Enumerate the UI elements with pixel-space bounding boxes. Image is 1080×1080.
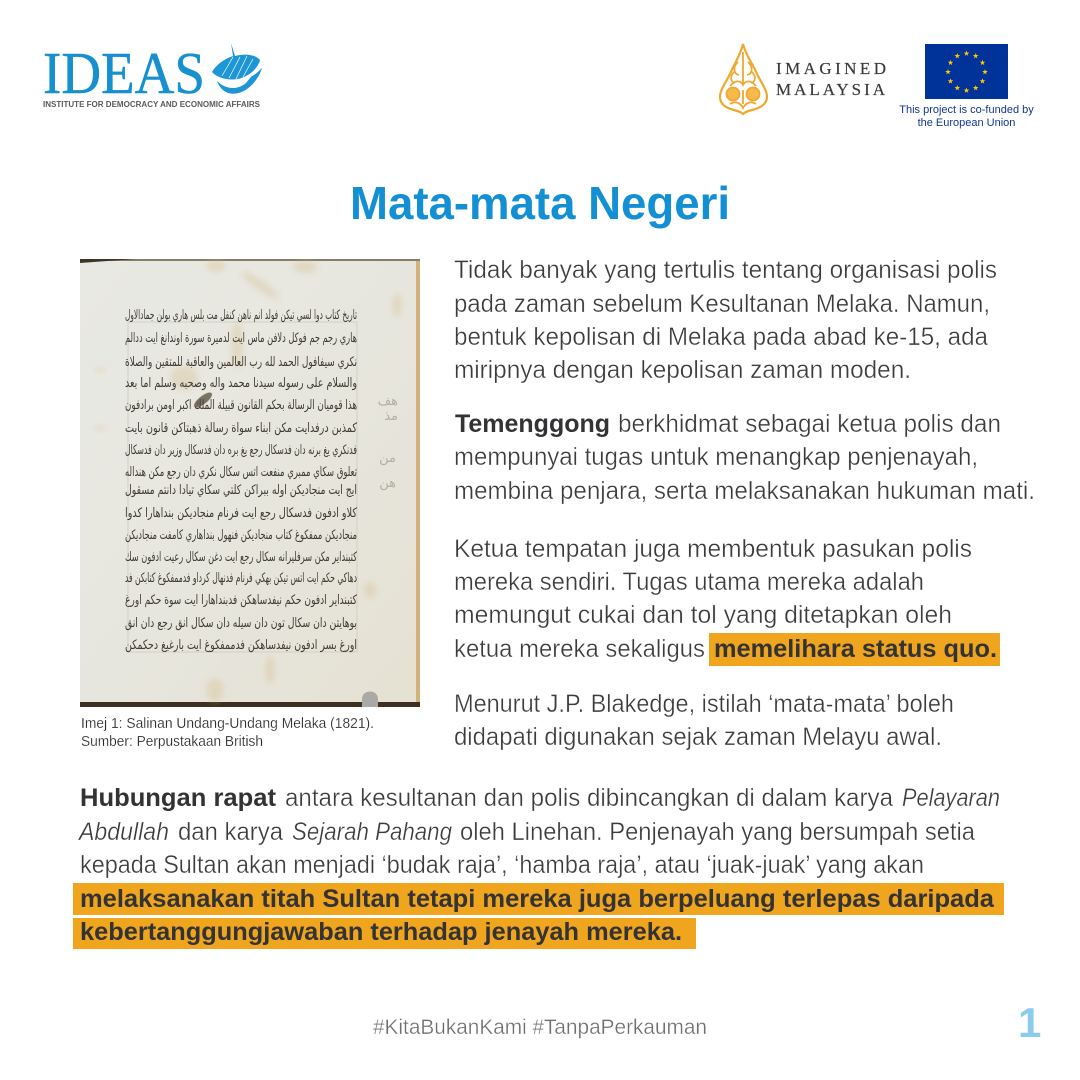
image caption xyxy=(81,716,374,750)
manuscript Jawi text: اورغ بسر ادفون نيفدساهكن فدممفكوغ ايت بارغيغ دحكمكن xyxy=(125,638,357,653)
title: Mata-mata Negeri xyxy=(350,177,730,229)
text block: sultanate and police: oleh Linehan. Penjenayah yang bersumpah setia xyxy=(460,818,975,846)
text block: sultanate and police: Sejarah Pahang xyxy=(292,818,452,846)
highlight: status quo xyxy=(709,633,1000,666)
manuscript Jawi text: والسلام على رسوله سيدنا محمد واله وصحبه وسلم اما بعد xyxy=(125,376,357,391)
manuscript stains xyxy=(93,260,402,702)
ruled text frame xyxy=(128,322,357,652)
text block: sultanate and police xyxy=(73,784,1004,949)
text block: Blakedge: didapati digunakan sejak zaman Melayu awal. xyxy=(454,723,942,751)
text block: sultanate and police: dan karya xyxy=(178,818,283,846)
wordmark: Imagined: IMAGINED xyxy=(776,59,886,78)
text block: local chiefs: ketua mereka sekaligus xyxy=(454,635,705,663)
text block: sultanate and police: kepada Sultan akan menjadi ‘budak raja’, ‘hamba raja’, atau ‘juak-juak’ yang akan xyxy=(80,851,924,879)
logo: IDEAS xyxy=(43,40,262,109)
text block: Temenggong: berkhidmat sebagai ketua polis dan xyxy=(618,410,1001,438)
text block: sultanate and police: antara kesultanan dan polis dibincangkan di dalam karya xyxy=(285,784,893,812)
wordmark: IDEAS: IDEAS xyxy=(43,40,205,106)
manuscript Jawi text: فدنكري يغ برنه دان فدسكال رجع يغ بره دان فدسكال وزير دان فدسكال xyxy=(125,443,357,458)
manuscript Jawi text: كتبنداير مكن سرفليرانه سكال رجع ايت دغن سكال رعيت ادفون سك xyxy=(125,550,358,565)
text block: Temenggong: membina penjara, serta melaksanakan hukuman mati. xyxy=(454,477,1035,505)
text block: pre-Melaka policing: bentuk kepolisan di Melaka pada abad ke-15, ada xyxy=(454,323,988,351)
manuscript page xyxy=(80,259,420,707)
text block: Temenggong: Temenggong xyxy=(455,410,610,438)
text block: Temenggong xyxy=(454,410,1035,505)
icon: gunungan xyxy=(720,44,767,114)
manuscript Jawi text: دهاكي حكم ايت اتس تيكن بهكي فرنام فدنهال كرداو فدممفكوغ كتابكن فد xyxy=(125,571,357,586)
ink smudge xyxy=(194,392,212,408)
margin notes: من xyxy=(379,451,396,466)
text block: sultanate and police: kebertanggungjawaban terhadap jenayah mereka. xyxy=(80,918,682,946)
tagline: institute name: INSTITUTE FOR DEMOCRACY AND ECONOMIC AFFAIRS xyxy=(43,100,261,109)
caption: EU co-funding xyxy=(899,104,1034,129)
icon: EU flag xyxy=(925,44,1008,99)
caption: EU co-funding: the European Union xyxy=(918,117,1015,129)
text block: sultanate and police: melaksanakan titah Sultan tetapi mereka juga berpeluang terlepas daripada xyxy=(80,885,995,913)
text block: local chiefs xyxy=(454,535,1000,666)
margin notes: هن xyxy=(379,476,396,491)
text block: pre-Melaka policing: pada zaman sebelum Kesultanan Melaka. Namun, xyxy=(454,290,990,318)
manuscript Jawi text: كتبنداير ادفون حكم نيفدساهكن فدبنداهارا ايت سوة حكم اورغ xyxy=(125,593,358,608)
text block: sultanate and police: Abdullah xyxy=(77,818,169,846)
text block: sultanate and police: Pelayaran xyxy=(902,784,1000,812)
image caption: Sumber: Perpustakaan British xyxy=(81,734,263,750)
manuscript Jawi text: هاري رجم جم فوكل دلافن ماس ايت لدميرة سورة اوندانغ ايت ددالم xyxy=(125,331,357,346)
text block: pre-Melaka policing: miripnya dengan kepolisan zaman moden. xyxy=(454,356,911,384)
text block: local chiefs: memungut cukai dan tol yang ditetapkan oleh xyxy=(454,601,952,629)
icon: IDEAS bird xyxy=(212,43,262,94)
highlight: Sultan's decree xyxy=(73,883,1004,915)
text block: local chiefs: mereka sendiri. Tugas utama mereka adalah xyxy=(454,568,924,596)
text block: local chiefs: memelihara status quo. xyxy=(714,635,997,663)
text block: Temenggong: mempunyai tugas untuk menangkap penjenayah, xyxy=(454,443,978,471)
margin notes xyxy=(378,398,398,490)
image: manuscript photo xyxy=(80,259,420,707)
manuscript Jawi text: ايج ايت منجاديكن اوله ببراكن كلتي سكاي تيادا دانتم مسقول xyxy=(125,483,357,498)
text block: pre-Melaka policing xyxy=(454,256,997,384)
manuscript Jawi text: تاريخ كتاب دوا لسي تيكن فولد انم ناهن كنفل مت بلس هاري بولن جمادالاول xyxy=(125,308,357,323)
margin notes: هف xyxy=(378,394,398,409)
logo: European Union xyxy=(899,44,1034,129)
text block: Blakedge: Menurut J.P. Blakedge, istilah ‘mata-mata’ boleh xyxy=(454,690,954,718)
text block: local chiefs: Ketua tempatan juga membentuk pasukan polis xyxy=(454,535,972,563)
caption: EU co-funding: This project is co-funded by xyxy=(899,104,1034,116)
image caption: Imej 1: Salinan Undang-Undang Melaka (1821). xyxy=(81,716,374,732)
text block: pre-Melaka policing: Tidak banyak yang tertulis tentang organisasi polis xyxy=(454,256,997,284)
text block: Blakedge xyxy=(454,690,954,751)
wordmark: Malaysia: MALAYSIA xyxy=(776,80,886,99)
manuscript Jawi text: هذا قوميان الرسالة بحكم القانون قبيلة الملك اكبر اومن برادفون xyxy=(125,398,357,413)
margin notes: مذ xyxy=(384,409,398,424)
footer hashtags: #KitaBukanKami #TanpaPerkauman xyxy=(373,1016,707,1039)
manuscript Jawi text: نكري سيفافول الحمد لله رب العالمين والعاقبة للمتقين والصلاة xyxy=(125,355,357,370)
manuscript Jawi text: بوهايتن دان سكال تون دان سيله دان سكال انق رجع دان انق xyxy=(125,616,357,631)
manuscript Jawi text: تعلوق سكاي ممبري منفعت اتس سكال نكري دان رجع مكن هنداله xyxy=(125,465,357,480)
highlight: accountability xyxy=(73,918,696,949)
text block: sultanate and police: Hubungan rapat xyxy=(80,784,277,812)
logo: Imagined Malaysia xyxy=(720,44,886,114)
page number: 1 xyxy=(1018,999,1041,1046)
bookmark weight xyxy=(362,692,378,707)
manuscript Jawi text xyxy=(125,308,358,653)
manuscript Jawi text: كلاو ادفون فدسكال رجع ايت فرنام منجاديكن بنداهارا كدوا xyxy=(125,506,358,521)
manuscript Jawi text: منجاديكن ممفكوغ كتاب منجاديكن فنهول بنداهاري كامفت منجاديكن xyxy=(125,528,357,543)
manuscript Jawi text: كمذبن درفدايت مكن ابناء سواة رسالة ذهبتاكن قانون بايت xyxy=(125,421,358,436)
